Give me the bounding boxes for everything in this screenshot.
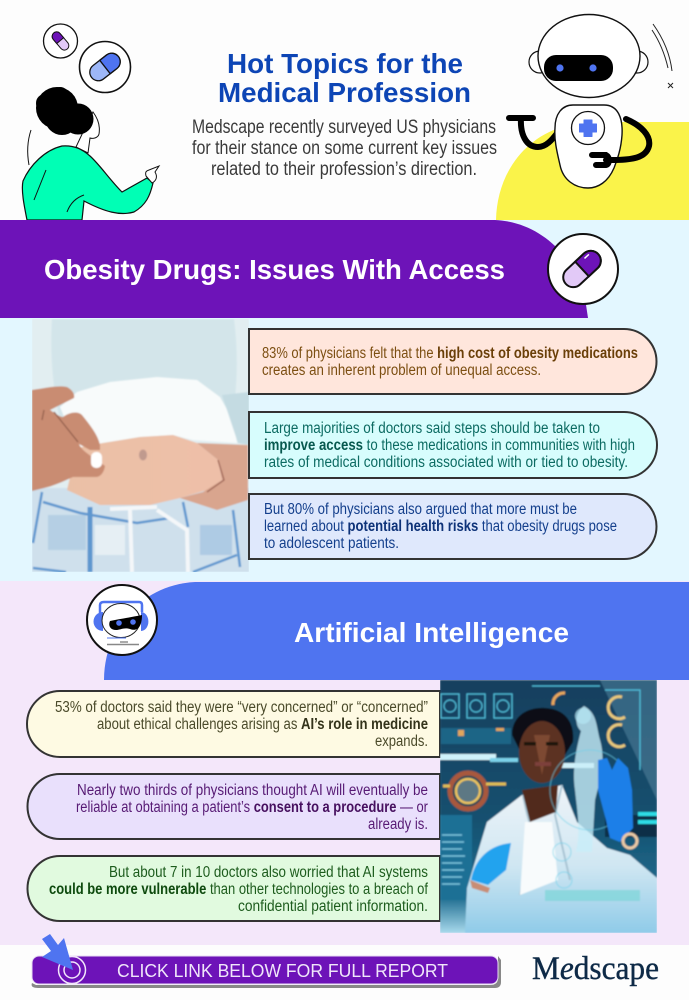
heading: artificial intelligence: Artificial Intelligence [294, 617, 569, 648]
card: high cost of obesity medications [249, 329, 656, 394]
card: potential health risks [249, 494, 656, 559]
motion lines [652, 24, 673, 88]
white shirt band [60, 377, 237, 448]
card: ethical challenges [27, 691, 440, 757]
section header: obesity drugs [0, 220, 588, 318]
card: improve access [249, 412, 657, 478]
title: Hot Topics for the [227, 48, 463, 79]
card: consent to a procedure: already is. [368, 816, 428, 833]
background: footer [0, 945, 689, 1000]
card: consent to a procedure: Nearly two thirds of physicians thought AI will eventually be [77, 782, 428, 799]
robot left arm [509, 118, 558, 147]
section header: artificial intelligence [104, 582, 689, 680]
card: ethical challenges: expands. [375, 733, 428, 750]
woman figure [22, 87, 159, 220]
card: improve access: improve access to these medications in communities with high [264, 437, 635, 454]
card: ethical challenges: about ethical challenges arising as AI’s role in medicine [97, 716, 428, 733]
button: click link for full report [32, 934, 501, 988]
illustration: woman pointing with pills [22, 24, 159, 220]
yellow shape behind robot [496, 122, 689, 220]
card: improve access: rates of medical conditions associated with or tied to obesity. [264, 454, 628, 471]
robot head [538, 14, 640, 98]
background: obesity section [0, 220, 689, 581]
title [218, 48, 471, 108]
card: consent to a procedure [28, 774, 440, 839]
photo: hand holding pill near belly [32, 319, 249, 572]
button label: CLICK LINK BELOW FOR FULL REPORT [117, 961, 448, 981]
card: ethical challenges: 53% of doctors said they were “very concerned” or “concerned” [55, 699, 428, 716]
card: could be more vulnerable: But about 7 in 10 doctors also worried that AI systems [109, 864, 428, 881]
intro text [192, 117, 497, 180]
intro text: for their stance on some current key issues [192, 138, 497, 159]
illustration: robot [509, 14, 673, 188]
lab coat [465, 785, 657, 933]
card: could be more vulnerable: confidential patient information. [238, 898, 428, 915]
background: header area [0, 0, 689, 221]
hair [512, 708, 573, 755]
icon: purple pill badge [548, 234, 618, 304]
card: potential health risks: learned about potential health risks that obesity drugs pose [264, 518, 617, 535]
background: AI section [0, 581, 689, 945]
intro text: related to their profession’s direction. [211, 159, 477, 180]
icon: click target with arrow [42, 934, 86, 984]
left hand [32, 386, 105, 491]
card: potential health risks: But 80% of physicians also argued that more must be [264, 501, 577, 518]
card: consent to a procedure: reliable at obtaining a patient’s consent to a procedure — or [76, 799, 428, 816]
right glove [598, 758, 633, 842]
hologram figure [574, 706, 603, 852]
robot chest badge [572, 112, 604, 144]
icon: small pill bubble [44, 24, 78, 58]
card: could be more vulnerable [28, 856, 440, 921]
left glove [471, 843, 511, 885]
robot body [555, 105, 622, 188]
card: high cost of obesity medications: 83% of physicians felt that the high cost of obesity medications [262, 345, 638, 362]
logo: Medscape: Medscape [532, 951, 659, 987]
photo: doctor with holographic display [440, 680, 657, 933]
title: Medical Profession [218, 77, 471, 108]
icon: large pill bubble [80, 42, 130, 92]
shirt background [32, 319, 249, 488]
card: improve access: Large majorities of doctors said steps should be taken to [264, 420, 600, 437]
pajama trousers [32, 488, 249, 572]
card: high cost of obesity medications: creates an inherent problem of unequal access. [262, 362, 541, 379]
face [519, 721, 565, 783]
card: potential health risks: to adolescent patients. [264, 535, 399, 552]
robot right arm [592, 119, 649, 165]
heading: obesity drugs: Obesity Drugs: Issues With Access [44, 254, 505, 285]
icon: robot badge [87, 585, 157, 655]
bare belly [67, 435, 222, 505]
card: could be more vulnerable: could be more vulnerable than other technologies to a breach of [49, 881, 429, 898]
intro text: Medscape recently surveyed US physicians [192, 117, 496, 138]
pill [91, 452, 102, 468]
robot visor [544, 55, 613, 81]
neck [522, 785, 558, 822]
robot ears [529, 51, 648, 73]
right hand [180, 443, 248, 510]
